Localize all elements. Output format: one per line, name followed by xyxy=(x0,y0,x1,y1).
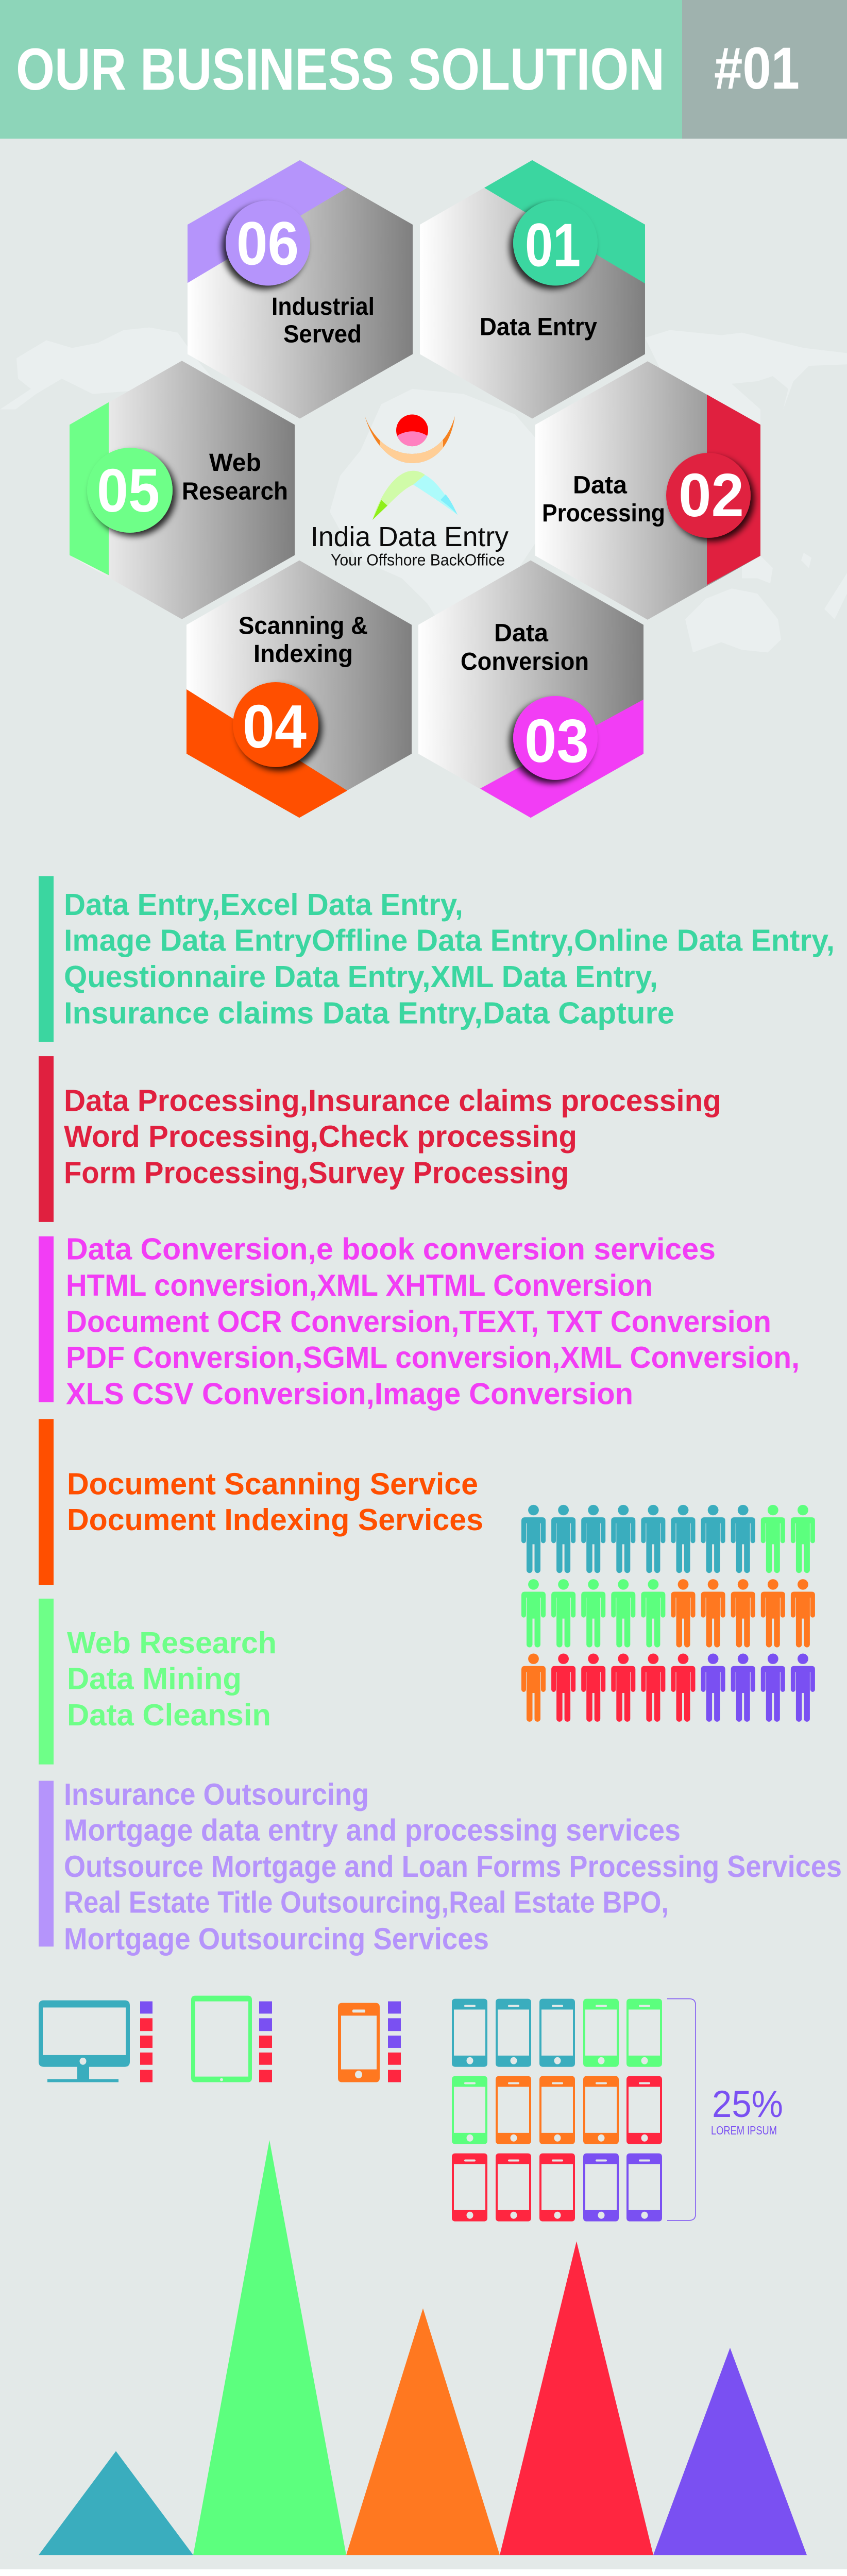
logo: India Data Entry xyxy=(311,415,509,569)
hexagon 05: web research: Web xyxy=(209,449,261,477)
service list: data entry: Questionnaire Data Entry,XML Data Entry, xyxy=(64,959,658,994)
stat: 25 percent: 25% xyxy=(712,2082,783,2125)
icon: tablet with bars xyxy=(191,1996,272,2082)
hexagon 04: scanning and indexing: Indexing xyxy=(253,640,353,668)
service list: data conversion: PDF Conversion,SGML conversion,XML Conversion, xyxy=(66,1340,800,1375)
hexagon 06: industrial served: Served xyxy=(283,320,362,348)
hexagon 05: web research: 05 xyxy=(97,457,160,525)
hexagon 03: data conversion xyxy=(418,561,643,818)
hexagon 03: data conversion: Conversion xyxy=(461,648,589,675)
service list: data conversion xyxy=(39,1232,800,1411)
hexagon 03: data conversion: 03 xyxy=(524,707,589,775)
hexagon 02: data processing: Processing xyxy=(542,499,665,527)
hexagon 01: data entry: Data Entry xyxy=(480,313,597,341)
stat: 25 percent: LOREM IPSUM xyxy=(711,2124,777,2137)
service list: industrial served: Insurance Outsourcing xyxy=(64,1777,369,1811)
pictogram: thirty people xyxy=(521,1505,815,1722)
service list: data processing: Word Processing,Check processing xyxy=(64,1119,577,1154)
service list: data conversion: Document OCR Conversion,TEXT, TXT Conversion xyxy=(66,1304,771,1338)
service list: web research xyxy=(39,1599,277,1765)
service list: data processing: Form Processing,Survey Processing xyxy=(64,1156,569,1190)
service list: data processing: Data Processing,Insurance claims processing xyxy=(64,1083,721,1117)
icon: smartphone with bars xyxy=(338,2002,401,2082)
service list: industrial served: Mortgage data entry and processing services xyxy=(64,1813,681,1848)
logo: India Data Entry: Your Offshore BackOffice xyxy=(331,551,505,569)
service list: data entry: Insurance claims Data Entry,Data Capture xyxy=(64,996,674,1030)
hexagon 02: data processing: Data xyxy=(573,471,628,499)
service list: data conversion: HTML conversion,XML XHTML Conversion xyxy=(66,1268,653,1302)
service list: industrial served: Mortgage Outsourcing Services xyxy=(64,1921,489,1956)
hexagon 04: scanning and indexing: 04 xyxy=(243,692,307,761)
logo: India Data Entry: India Data Entry xyxy=(311,521,509,552)
world map backdrop xyxy=(0,328,847,652)
hexagon 02: data processing xyxy=(535,361,760,620)
pictogram: fifteen phones xyxy=(452,1999,662,2222)
hexagon 01: data entry xyxy=(420,160,645,418)
service list: scanning and indexing: Document Indexing Services xyxy=(67,1502,483,1537)
service list: data entry: Image Data EntryOffline Data Entry,Online Data Entry, xyxy=(64,923,835,957)
service list: web research: Web Research xyxy=(67,1625,277,1660)
bracket xyxy=(667,1999,696,2221)
service list: data conversion: XLS CSV Conversion,Image Conversion xyxy=(66,1377,633,1411)
hexagon 02: data processing: 02 xyxy=(679,462,744,530)
icon: desktop monitor with bars xyxy=(39,2001,153,2082)
hexagon 05: web research xyxy=(70,361,295,619)
triangle chart xyxy=(39,2140,807,2555)
service list: industrial served xyxy=(39,1777,842,1956)
hexagon 06: industrial served xyxy=(188,160,413,418)
hexagon 03: data conversion: Data xyxy=(494,619,549,647)
hexagon 01: data entry: 01 xyxy=(525,211,581,279)
service list: scanning and indexing: Document Scanning Service xyxy=(67,1466,478,1501)
hexagon 06: industrial served: Industrial xyxy=(272,293,375,320)
service list: data entry xyxy=(39,876,835,1042)
issue number: #01 xyxy=(714,35,800,101)
hexagon 04: scanning and indexing: Scanning & xyxy=(239,612,368,640)
header banner xyxy=(0,0,847,139)
service list: data entry: Data Entry,Excel Data Entry, xyxy=(64,887,463,922)
hexagon 05: web research: Research xyxy=(182,478,288,505)
service list: industrial served: Real Estate Title Outsourcing,Real Estate BPO, xyxy=(64,1885,669,1920)
service list: data conversion: Data Conversion,e book conversion services xyxy=(66,1232,716,1266)
service list: web research: Data Mining xyxy=(67,1662,242,1696)
hexagon 04: scanning and indexing xyxy=(187,561,412,818)
service list: data processing xyxy=(39,1056,721,1222)
service list: scanning and indexing xyxy=(39,1419,483,1585)
hexagon 06: industrial served: 06 xyxy=(236,210,299,278)
service list: web research: Data Cleansin xyxy=(67,1698,271,1732)
title: OUR BUSINESS SOLUTION xyxy=(16,36,665,103)
